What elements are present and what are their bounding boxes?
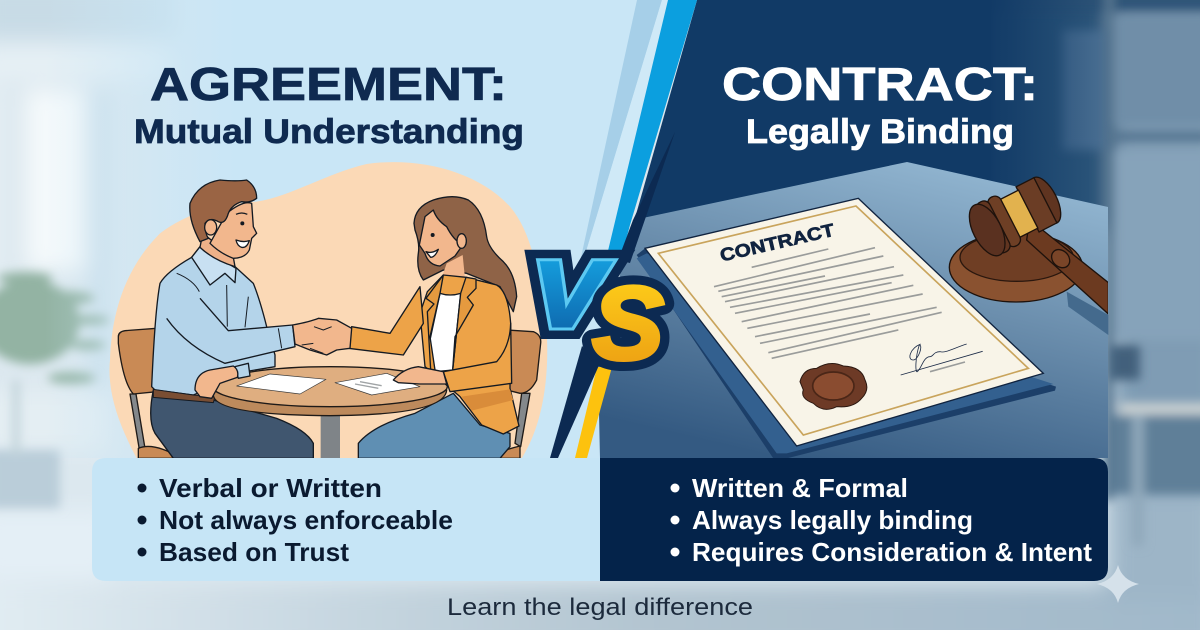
left chair: [118, 328, 182, 458]
heading: agreement: AGREEMENT:: [150, 58, 507, 110]
woman trousers: [358, 393, 510, 458]
panel: contract bullets background: [600, 458, 1108, 581]
man belt: [153, 389, 215, 403]
wax seal: [800, 363, 867, 409]
heading: agreement: Mutual Understanding: [134, 113, 524, 151]
woman hand on table: [393, 367, 447, 384]
table papers: [237, 373, 420, 395]
panel: agreement bullets background: [92, 458, 600, 581]
table: [213, 367, 447, 459]
right chair: [483, 330, 541, 458]
vs badge: [533, 244, 664, 382]
plant: [0, 272, 110, 508]
man figure: [151, 180, 313, 458]
agreement bullet list: Verbal or Written: [159, 473, 382, 503]
man trousers: [151, 390, 313, 458]
contract bullet list: Requires Consideration & Intent: [692, 537, 1092, 567]
letter V: V: [533, 244, 611, 346]
woman figure: [348, 197, 519, 434]
heading: contract: Legally Binding: [746, 113, 1014, 151]
contract bullet list: [670, 473, 1092, 567]
heading: contract: [722, 58, 1038, 151]
man shirt: [152, 247, 275, 395]
illustration: signed contract document: [637, 170, 1108, 458]
panel: agreement background: [45, 0, 668, 458]
woman jacket: [420, 275, 519, 434]
contract paper: [645, 198, 1043, 446]
footer caption: Learn the legal difference: [447, 594, 753, 621]
heading: agreement: [134, 58, 524, 151]
handshake: [293, 318, 352, 355]
man sleeve: [167, 298, 295, 363]
man head: [200, 233, 235, 267]
signature: [901, 344, 983, 375]
right office windows: [985, 0, 1200, 546]
woman face: [443, 255, 465, 293]
illustration: handshake at a table: [109, 162, 547, 459]
gavel: [949, 170, 1108, 314]
panel: contract background: [633, 0, 1112, 225]
contract text lines: [714, 248, 965, 372]
contract heading: CONTRACT: [718, 220, 836, 266]
diagonal accent bands: [575, 0, 697, 458]
letter V: V: [533, 244, 611, 346]
contract bullet list: Written & Formal: [692, 473, 908, 503]
agreement bullet list: [138, 473, 453, 567]
letter V: V: [533, 244, 611, 346]
letter S: S: [592, 266, 664, 382]
woman arm: [348, 287, 423, 355]
lightning divider: [550, 132, 675, 458]
contract bullet list: Always legally binding: [692, 505, 973, 535]
agreement bullet list: Not always enforceable: [159, 505, 453, 535]
heading: contract: CONTRACT:: [722, 58, 1038, 110]
man hand on table: [195, 363, 250, 398]
woman hair: [414, 197, 517, 312]
gavel shadow: [1067, 292, 1108, 335]
icon: sparkle: [1097, 565, 1139, 603]
peach blob: [109, 162, 547, 458]
desk surface: [598, 162, 1108, 458]
letter S: S: [592, 266, 664, 382]
man collar: [192, 247, 236, 285]
agreement bullet list: Based on Trust: [159, 537, 349, 567]
